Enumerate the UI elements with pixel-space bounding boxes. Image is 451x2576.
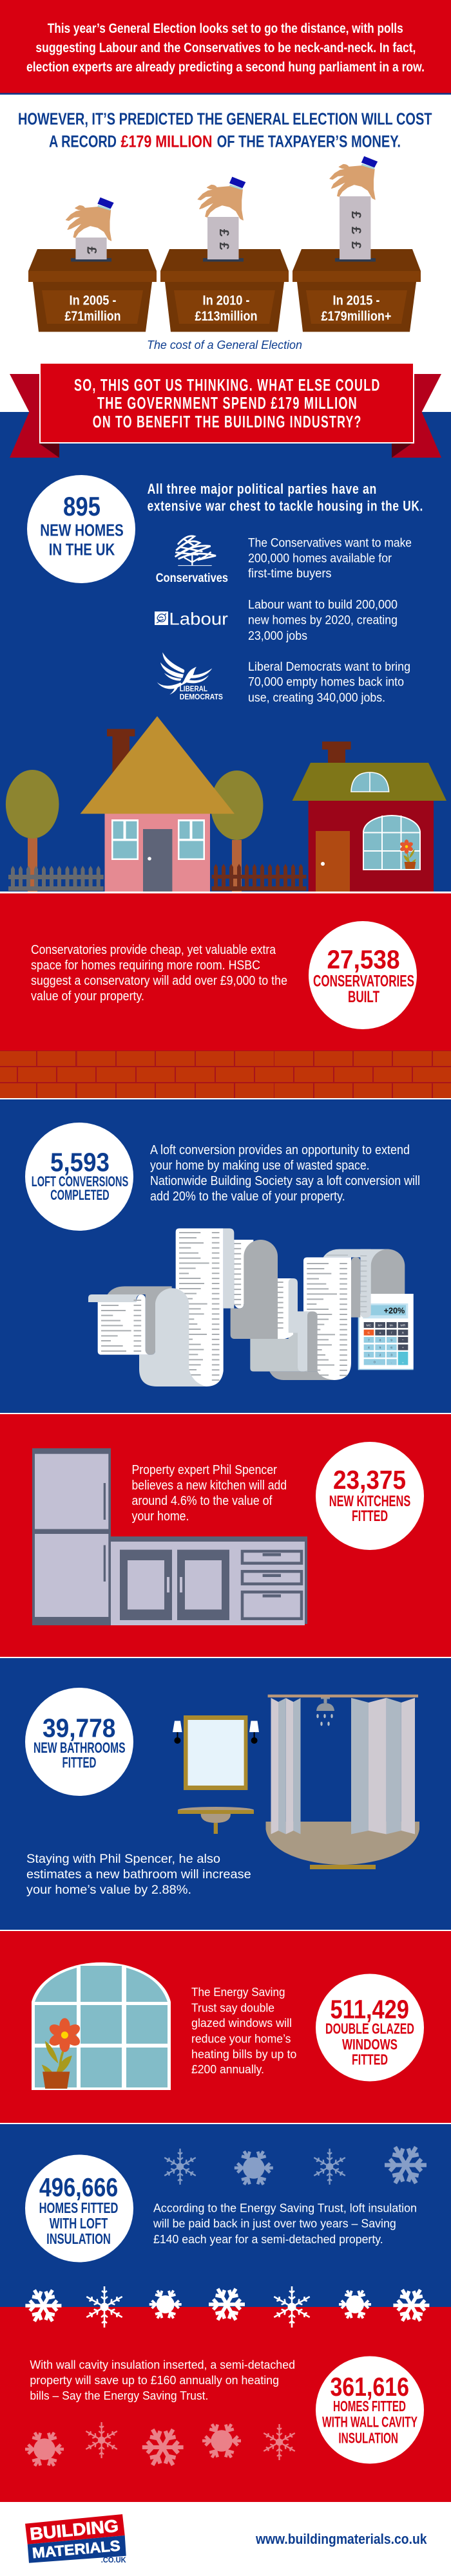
wall cavity text: bills – Say the Energy Saving Trust.: [30, 2389, 208, 2402]
chart: ballot box 2015: £: [349, 241, 363, 249]
double glazing text: glazed windows will: [191, 2016, 292, 2030]
circle stat: bathrooms: FITTED: [62, 1754, 97, 1771]
tree: right: [211, 770, 264, 891]
illustration: kitchen units: [111, 1536, 307, 1625]
calculator: 5: [379, 1346, 381, 1350]
calculator: C: [368, 1331, 370, 1335]
chart: ballot box 2015: £: [349, 227, 363, 234]
circle stat: bathrooms: 39,778: [43, 1713, 115, 1743]
chart: ballot box 2005: In 2005 -: [70, 292, 116, 308]
calculator: M+: [378, 1323, 383, 1327]
illustration: window with flower: [32, 1963, 171, 2090]
chart: ballot box 2010: In 2010 -: [202, 292, 250, 308]
circle stat: conservatories: BUILT: [348, 988, 379, 1006]
chart: ballot box 2005: £: [84, 247, 99, 254]
snowflakes: red band: [25, 2422, 296, 2469]
loft insulation text: According to the Energy Saving Trust, loft insulation: [153, 2201, 417, 2214]
illustration: fridge: [32, 1448, 111, 1625]
chart: ballot box 2005: [28, 198, 157, 332]
Labour pledge: Labour want to build 200,000: [248, 597, 398, 611]
panel: kitchens: [0, 1414, 451, 1658]
chart: ballot box 2015: £179million+: [321, 308, 392, 324]
calculator: 1: [368, 1353, 370, 1357]
bathroom text: [26, 1853, 251, 1897]
calculator: X: [402, 1331, 405, 1335]
chart: ballot box 2015: [293, 156, 421, 331]
kitchen text: your home.: [131, 1509, 189, 1524]
circle stat: wall cavity: [316, 2356, 424, 2464]
chart: ballot box 2010: [160, 177, 289, 332]
circle stat: kitchens: 23,375: [333, 1465, 406, 1495]
panel: conservatories: [0, 893, 451, 1099]
double glazing text: The Energy Saving: [191, 1985, 285, 1999]
logo: Conservatives: Conservatives: [156, 572, 228, 585]
logo: Liberal Democrats: DEMOCRATS: [180, 694, 223, 702]
loft conversion text: add 20% to the value of your property.: [150, 1190, 345, 1204]
chart caption: The cost of a General Election: [147, 339, 302, 351]
circle stat: loft insulation: [25, 2155, 133, 2262]
bathroom text: your home’s value by 2.88%.: [26, 1883, 191, 1897]
double glazing text: Trust say double: [191, 2001, 274, 2014]
panel: loft conversions: [0, 1099, 451, 1414]
Labour pledge: 23,000 jobs: [248, 629, 307, 643]
Liberal Democrats pledge: use, creating 340,000 jobs.: [248, 691, 385, 705]
snowflakes: blue band: [163, 2144, 427, 2187]
calculator: /: [391, 1331, 392, 1335]
logo: Building Materials: .CO.UK: [101, 2557, 126, 2564]
panel: bathrooms: [0, 1658, 451, 1931]
Conservatives pledge: [248, 536, 412, 581]
chart: ballot box 2015: £: [349, 211, 363, 219]
circle stat: loft conversions: LOFT CONVERSIONS: [32, 1173, 128, 1190]
circle stat: bathrooms: [25, 1688, 133, 1796]
website address: www.buildingmaterials.co.uk: [255, 2531, 427, 2547]
Conservatives pledge: 200,000 homes available for: [248, 552, 392, 566]
housing heading: [148, 481, 423, 514]
calculator: 9: [390, 1338, 392, 1342]
circle stat: kitchens: FITTED: [352, 1507, 388, 1525]
Liberal Democrats pledge: [248, 660, 410, 705]
kitchen text: Property expert Phil Spencer: [131, 1463, 277, 1477]
double glazing text: reduce your home’s: [191, 2031, 291, 2045]
wall cavity text: [30, 2358, 295, 2402]
calculator: 0: [374, 1361, 376, 1365]
circle stat: double glazing: DOUBLE GLAZED: [325, 2021, 414, 2037]
circle stat: conservatories: 27,538: [327, 945, 399, 975]
calculator: 2: [379, 1353, 381, 1357]
chart: ballot box 2010: £: [216, 229, 231, 237]
logo: Liberal Democrats: LIBERAL: [180, 686, 207, 693]
bathroom text: estimates a new bathroom will increase: [26, 1868, 251, 1881]
double glazing text: [191, 1985, 296, 2076]
illustration: sink: [178, 1807, 254, 1834]
heading: cost of election: A RECORD: [49, 132, 117, 151]
panel: housing: [0, 412, 451, 893]
illustration: shower: [265, 1695, 419, 1869]
Liberal Democrats pledge: Liberal Democrats want to bring: [248, 660, 410, 674]
receipt middle: [234, 1240, 253, 1304]
logo: Building Materials: MATERIALS: [32, 2537, 121, 2561]
banner: what else could the government spend: [10, 363, 441, 458]
footer: [0, 2502, 451, 2576]
fence: brown: [212, 864, 306, 891]
circle stat: loft insulation: HOMES FITTED: [39, 2199, 118, 2216]
conservatories text: Conservatories provide cheap, yet valuable extra: [31, 943, 276, 957]
conservatories text: [31, 943, 287, 1003]
loft insulation text: [153, 2201, 417, 2246]
circle stat: new homes: IN THE UK: [49, 539, 115, 559]
panel: introduction: [0, 0, 451, 95]
calculator: 3: [390, 1353, 392, 1357]
calculator: MC: [366, 1323, 372, 1327]
circle stat: kitchens: [316, 1442, 424, 1550]
calculator: [358, 1294, 414, 1370]
calculator: 7: [368, 1338, 370, 1342]
loft conversion text: A loft conversion provides an opportunity to extend: [150, 1143, 410, 1157]
wall cavity text: property will save up to £160 annually on heating: [30, 2373, 279, 2387]
logo: Liberal Democrats: [157, 652, 223, 702]
receipt left: [108, 1286, 172, 1355]
Liberal Democrats pledge: 70,000 empty homes back into: [248, 675, 404, 689]
circle stat: loft insulation: INSULATION: [46, 2230, 111, 2247]
circle stat: double glazing: WINDOWS: [342, 2036, 398, 2053]
double glazing text: £200 annually.: [191, 2062, 264, 2076]
circle stat: new homes: 895: [63, 491, 101, 521]
Conservatives pledge: The Conservatives want to make: [248, 536, 412, 550]
receipt tall: [176, 1228, 224, 1386]
calculator: .: [391, 1361, 392, 1365]
calculator: −: [402, 1338, 404, 1342]
loft insulation text: will be paid back in just over two years – Saving: [153, 2217, 396, 2230]
circle stat: double glazing: [316, 1974, 424, 2082]
chart: ballot box 2005: £71million: [64, 308, 121, 324]
brick wall: [0, 1050, 451, 1098]
circle stat: wall cavity: 361,616: [330, 2372, 409, 2402]
circle stat: loft conversions: 5,593: [50, 1147, 110, 1177]
snowflakes: white divider row: [25, 2286, 429, 2328]
Labour pledge: [248, 597, 398, 643]
panel: loft insulation: [0, 2124, 451, 2307]
calculator: MR: [400, 1323, 406, 1327]
circle stat: kitchens: NEW KITCHENS: [329, 1493, 410, 1510]
receipt right: [303, 1257, 351, 1380]
intro text: [26, 21, 425, 75]
calculator: +20%: [384, 1306, 405, 1315]
Labour pledge: new homes by 2020, creating: [248, 613, 398, 628]
chart: ballot box 2010: £113million: [195, 308, 258, 324]
calculator: =: [402, 1361, 404, 1365]
wall cavity text: With wall cavity insulation inserted, a semi-detached: [30, 2358, 295, 2371]
panel: double glazing: [0, 1931, 451, 2124]
heading: cost of election: £179 MILLION: [121, 132, 213, 151]
double glazing text: heating bills by up to: [191, 2047, 296, 2061]
panel: wall cavity insulation: [0, 2307, 451, 2502]
kitchen text: around 4.6% to the value of: [131, 1494, 273, 1508]
heading: cost of election: OF THE TAXPAYER’S MONEY.: [217, 132, 401, 151]
calculator: M-: [390, 1323, 394, 1327]
circle stat: new homes: [27, 475, 135, 583]
calculator: 6: [390, 1346, 392, 1350]
logo: Building Materials: [25, 2514, 126, 2564]
conservatories text: suggest a conservatory will add over £9,000 to the: [31, 974, 287, 988]
circle stat: bathrooms: NEW BATHROOMS: [34, 1739, 126, 1756]
circle stat: loft insulation: WITH LOFT: [50, 2215, 108, 2232]
circle stat: wall cavity: INSULATION: [338, 2429, 398, 2446]
calculator: 4: [368, 1346, 370, 1350]
chart: ballot box 2015: In 2015 -: [332, 292, 380, 308]
circle stat: double glazing: 511,429: [330, 1994, 409, 2024]
conservatories text: value of your property.: [31, 989, 144, 1003]
circle stat: double glazing: FITTED: [352, 2051, 388, 2068]
kitchen text: believes a new kitchen will add: [131, 1479, 287, 1493]
calculator: 8: [379, 1338, 381, 1342]
circle stat: loft insulation: 496,666: [39, 2172, 118, 2202]
loft insulation text: £140 each year for a semi-detached property.: [153, 2232, 383, 2246]
heading: cost of election: [18, 109, 432, 151]
logo: Conservatives: [156, 536, 228, 585]
fence: grey: [8, 866, 104, 891]
circle stat: new homes: NEW HOMES: [40, 520, 124, 539]
logo: Building Materials: BUILDING: [29, 2516, 119, 2544]
circle stat: conservatories: [309, 921, 417, 1029]
loft conversion text: Nationwide Building Society say a loft conversion will: [150, 1174, 420, 1188]
house: red: [293, 742, 446, 891]
loft conversion text: your home by making use of wasted space.: [150, 1159, 370, 1173]
circle stat: wall cavity: HOMES FITTED: [333, 2398, 406, 2414]
calculator: +: [402, 1346, 404, 1350]
illustration: receipts and calculator: [88, 1228, 414, 1386]
logo: Labour: Labour: [169, 610, 228, 629]
chart: ballot box 2010: £: [216, 243, 231, 250]
bathroom text: Staying with Phil Spencer, he also: [26, 1853, 220, 1866]
conservatories text: space for homes requiring more room. HSBC: [31, 958, 260, 973]
kitchen text: [131, 1463, 287, 1524]
illustration: mirror and lamps: [173, 1715, 259, 1790]
loft conversion text: [150, 1143, 420, 1204]
tree: left: [6, 770, 59, 891]
calculator: ±: [379, 1331, 381, 1335]
house: pink: [80, 716, 235, 891]
housing heading: All three major political parties have an: [148, 481, 377, 497]
circle stat: loft conversions: [25, 1123, 133, 1231]
Conservatives pledge: first-time buyers: [248, 566, 332, 581]
circle stat: loft conversions: COMPLETED: [50, 1187, 110, 1203]
